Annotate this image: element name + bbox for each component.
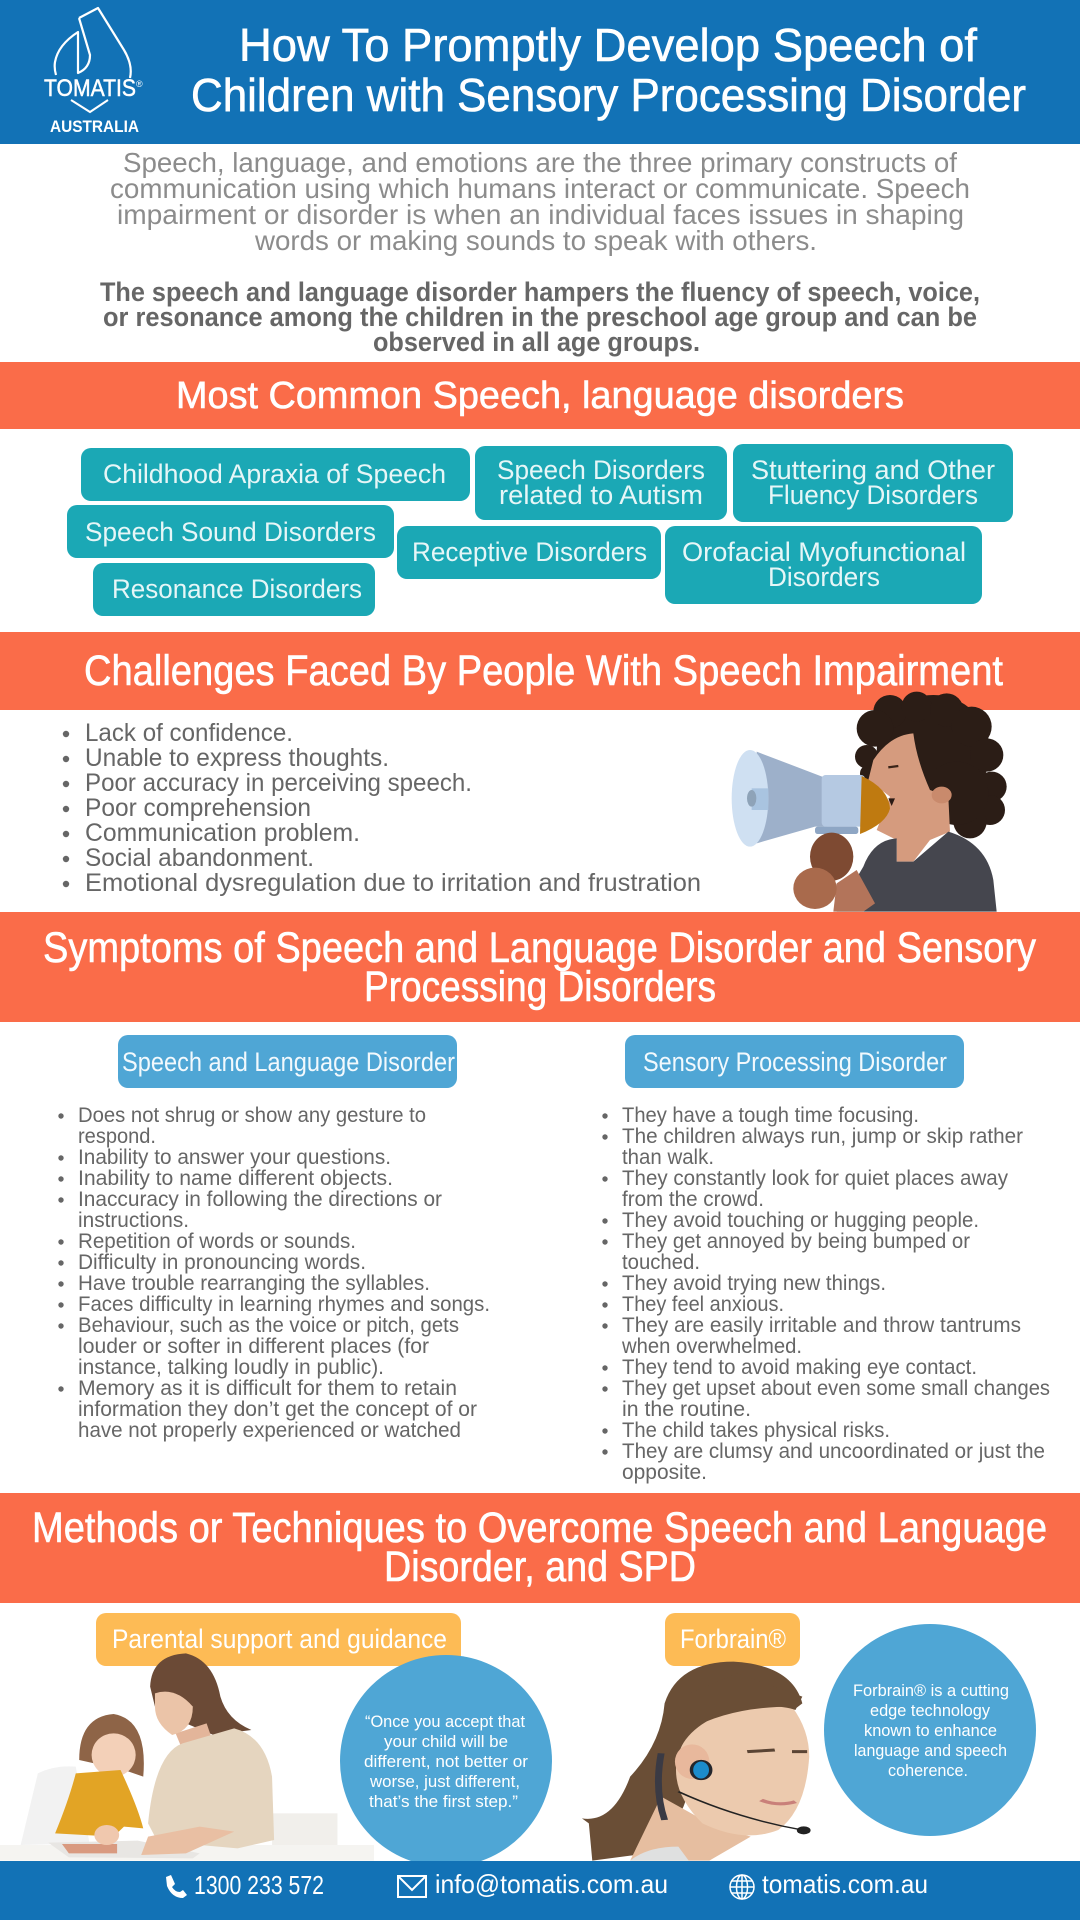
section heading: symptoms: Processing Disorders (364, 963, 716, 1011)
challenges list: Lack of confidence. (85, 719, 293, 747)
pill: Speech and Language Disorder (118, 1035, 457, 1088)
intro bold statement: The speech and language disorder hampers the fluency of speech, voice, (100, 277, 980, 307)
pill: Speech and Language Disorder: Speech and Language Disorder (122, 1047, 455, 1077)
chip: Stuttering (733, 444, 1013, 522)
logo: Tomatis Australia: TOMATIS (44, 75, 136, 102)
disorder chips (67, 444, 1013, 616)
callout: Forbrain circle: edge technology (870, 1701, 990, 1720)
symptoms list: sensory processing: opposite. (622, 1461, 707, 1484)
symptoms list: sensory processing: than walk. (622, 1146, 714, 1169)
symptoms list: sensory processing: They get annoyed by being bumped or (622, 1230, 970, 1253)
callout: quote circle: that’s the first step.” (369, 1792, 518, 1811)
chip: Autism: related to Autism (499, 480, 703, 510)
symptoms list: sensory processing: They are clumsy and uncoordinated or just the (622, 1440, 1045, 1463)
pill: Forbrain: Forbrain® (680, 1624, 786, 1654)
pill: Parental support and guidance (96, 1613, 461, 1666)
section heading: challenges (0, 632, 1080, 710)
callout: Forbrain circle: language and speech (854, 1741, 1007, 1760)
chip: Childhood Apraxia: Childhood Apraxia of Speech (103, 459, 446, 489)
intro paragraph: impairment or disorder is when an individual faces issues in shaping (117, 199, 964, 230)
challenges list: Communication problem. (85, 819, 360, 847)
header banner (0, 0, 1080, 144)
symptoms list: sensory processing: They constantly look for quiet places away (622, 1167, 1008, 1190)
callout: Forbrain circle: known to enhance (864, 1721, 997, 1740)
logo: Tomatis Australia: AUSTRALIA (50, 117, 139, 136)
chip: Speech Sound: Speech Sound Disorders (85, 517, 376, 547)
chip: Receptive: Receptive Disorders (412, 537, 647, 567)
intro paragraph: Speech, language, and emotions are the three primary constructs of (123, 147, 957, 178)
section heading: most common disorders: Most Common Speech, language disorders (176, 375, 904, 417)
chip: Orofacial: Orofacial Myofunctional (682, 537, 966, 567)
icon: globe (730, 1875, 754, 1899)
symptoms list: speech and language: information they don’t get the concept of or (78, 1398, 477, 1421)
photo: boy shouting into megaphone (732, 692, 1007, 912)
pill: Sensory Processing Disorder (625, 1035, 964, 1088)
chip: Stuttering: Fluency Disorders (768, 480, 978, 510)
symptoms list: sensory processing: when overwhelmed. (621, 1335, 802, 1358)
symptoms list: sensory processing: They avoid touching or hugging people. (622, 1209, 979, 1232)
symptoms list: sensory processing: They have a tough time focusing. (622, 1104, 919, 1127)
callout: Forbrain circle (824, 1624, 1036, 1836)
section heading: symptoms (0, 912, 1080, 1022)
symptoms list: speech and language (58, 1104, 490, 1442)
symptoms list: sensory processing: They avoid trying new things. (622, 1272, 886, 1295)
section heading: most common disorders (0, 362, 1080, 429)
symptoms list: speech and language: Difficulty in pronouncing words. (78, 1251, 366, 1274)
symptoms list: speech and language: respond. (78, 1125, 156, 1148)
callout: Forbrain circle: coherence. (888, 1761, 968, 1780)
symptoms list: speech and language: Repetition of words or sounds. (78, 1230, 356, 1253)
intro bold statement (100, 277, 980, 357)
challenges list: Poor comprehension (85, 794, 311, 822)
symptoms list: sensory processing: in the routine. (622, 1398, 751, 1421)
symptoms list: speech and language: Faces difficulty in learning rhymes and songs. (78, 1293, 490, 1316)
chip: Speech Sound (67, 505, 394, 558)
intro paragraph: words or making sounds to speak with others. (254, 225, 817, 256)
symptoms list: sensory processing: from the crowd. (622, 1188, 764, 1211)
chip: Stuttering: Stuttering and Other (751, 455, 995, 485)
symptoms list: speech and language: Behaviour, such as the voice or pitch, gets (78, 1314, 459, 1337)
callout: Forbrain circle: Forbrain® is a cutting (853, 1681, 1009, 1700)
symptoms list: speech and language: Have trouble rearranging the syllables. (78, 1272, 430, 1295)
symptoms list: sensory processing: They tend to avoid making eye contact. (622, 1356, 977, 1379)
logo: Tomatis Australia (44, 8, 143, 136)
symptoms list: speech and language: instance, talking loudly in public). (78, 1356, 384, 1379)
callout: quote circle: worse, just different, (369, 1772, 520, 1791)
chip: Orofacial: Disorders (768, 562, 880, 592)
chip: Resonance: Resonance Disorders (112, 574, 362, 604)
chip: Autism (475, 446, 727, 520)
symptoms list: sensory processing (602, 1104, 1050, 1484)
challenges list: Emotional dysregulation due to irritation and frustration (85, 869, 701, 897)
photo: mother and child reading (0, 1653, 374, 1861)
symptoms list: sensory processing: They get upset about even some small changes (622, 1377, 1050, 1400)
photo: girl wearing Forbrain headset (582, 1662, 811, 1861)
callout: quote circle: “Once you accept that (365, 1712, 525, 1731)
section heading: methods: Disorder, and SPD (384, 1543, 696, 1591)
challenges list: Social abandonment. (85, 844, 314, 872)
callout: quote circle: your child will be (384, 1732, 508, 1751)
callout: quote circle: different, not better or (364, 1752, 528, 1771)
intro bold statement: or resonance among the children in the preschool age group and can be (103, 302, 977, 332)
callout: quote circle (340, 1655, 552, 1867)
symptoms list: sensory processing: They are easily irritable and throw tantrums (622, 1314, 1021, 1337)
symptoms list: speech and language: Inaccuracy in following the directions or (78, 1188, 442, 1211)
pill: Parental support and guidance: Parental support and guidance (112, 1624, 447, 1654)
website: tomatis.com.au (762, 1869, 928, 1899)
chip: Receptive (397, 526, 661, 579)
footer contact bar (0, 1861, 1080, 1920)
challenges list (63, 719, 701, 897)
chip: Orofacial (665, 526, 982, 604)
chip: Childhood Apraxia (81, 448, 470, 501)
pill: Forbrain (665, 1613, 800, 1666)
symptoms list: sensory processing: The child takes physical risks. (622, 1419, 890, 1442)
challenges list: Unable to express thoughts. (85, 744, 389, 772)
symptoms list: sensory processing: They feel anxious. (622, 1293, 784, 1316)
symptoms list: speech and language: Inability to answer your questions. (78, 1146, 391, 1169)
chip: Autism: Speech Disorders (497, 455, 705, 485)
intro paragraph: communication using which humans interact or communicate. Speech (110, 173, 970, 204)
email address: info@tomatis.com.au (435, 1869, 668, 1899)
phone number: 1300 233 572 (194, 1870, 324, 1900)
intro bold statement: observed in all age groups. (373, 327, 700, 357)
title: How To Promptly Develop Speech of (239, 19, 977, 71)
symptoms list: speech and language: Does not shrug or show any gesture to (78, 1104, 426, 1127)
logo: Tomatis Australia: ® (136, 79, 143, 89)
icon: envelope (398, 1876, 426, 1897)
title (191, 19, 1026, 121)
symptoms list: speech and language: louder or softer in different places (for (78, 1335, 429, 1358)
symptoms list: speech and language: instructions. (78, 1209, 189, 1232)
intro paragraph (110, 147, 970, 256)
symptoms list: speech and language: have not properly experienced or watched (78, 1419, 461, 1442)
section heading: methods (0, 1493, 1080, 1603)
icon: phone (166, 1875, 187, 1898)
pill: Sensory Processing Disorder: Sensory Processing Disorder (643, 1047, 947, 1077)
symptoms list: speech and language: Memory as it is difficult for them to retain (78, 1377, 457, 1400)
symptoms list: speech and language: Inability to name different objects. (78, 1167, 393, 1190)
challenges list: Poor accuracy in perceiving speech. (85, 769, 472, 797)
symptoms list: sensory processing: touched. (622, 1251, 700, 1274)
title: Children with Sensory Processing Disorder (191, 69, 1026, 121)
symptoms list: sensory processing: The children always run, jump or skip rather (622, 1125, 1023, 1148)
chip: Resonance (93, 563, 375, 616)
